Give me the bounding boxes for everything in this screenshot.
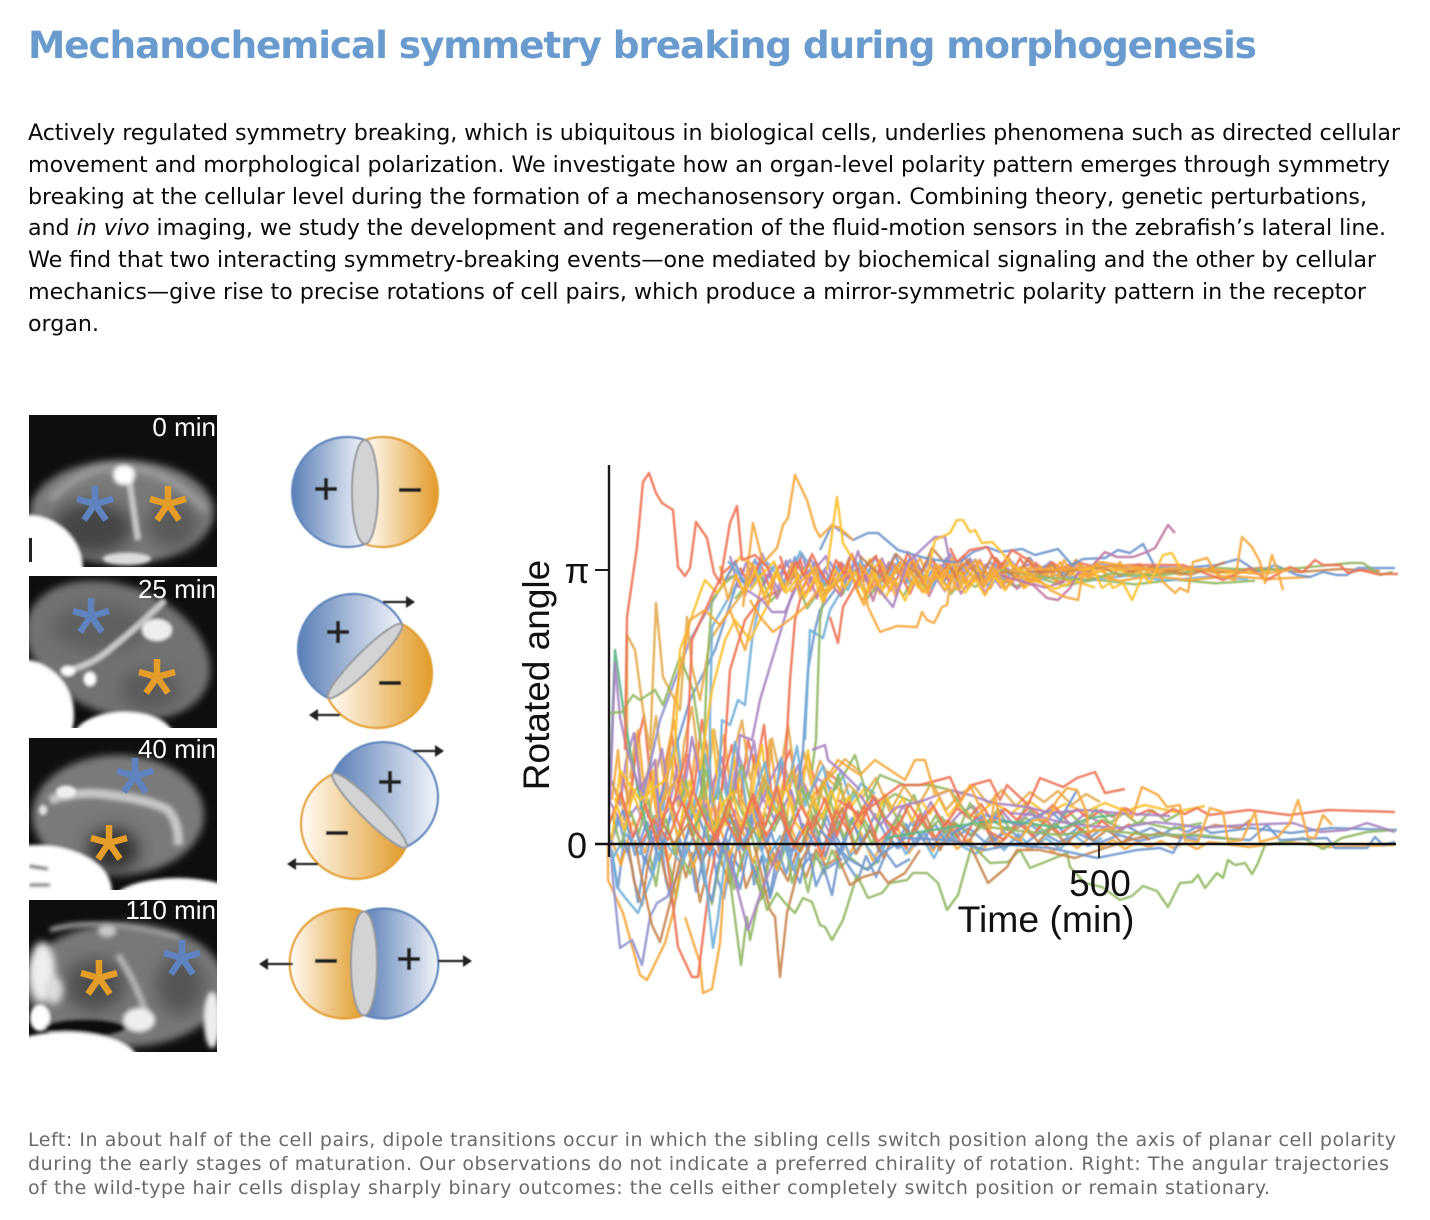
text block: abstract: mechanics—give rise to precise rotations of cell pairs, which produce a mirror-symmetric polarity pattern in the receptor xyxy=(28,279,1367,305)
y tick label: 0: 0 xyxy=(567,825,587,866)
dipole: rotating 135 degrees xyxy=(287,742,444,879)
text block: abstract: breaking at the cellular level during the formation of a mechanosensory organ. Combining theory, genetic perturbations, xyxy=(28,184,1367,210)
caption: during the early stages of maturation. Our observations do not indicate a preferred chirality of rotation. Right: The angular trajectories xyxy=(28,1153,1389,1175)
micrograph: 40 min xyxy=(29,738,217,890)
text block: abstract: Actively regulated symmetry breaking, which is ubiquitous in biological cells, underlies phenomena such as directed cellular xyxy=(28,120,1401,146)
asterisk: blue xyxy=(77,486,113,520)
text block: abstract: and in vivo imaging, we study the development and regeneration of the fluid-motion sensors in the zebrafish’s lateral line. xyxy=(28,215,1386,241)
micrograph: 40 min: 40 min xyxy=(138,734,216,764)
text block: abstract: organ. xyxy=(28,311,99,337)
caption xyxy=(28,1129,1396,1199)
micrograph: 0 min: 0 min xyxy=(152,412,216,442)
x axis label: Time (min) xyxy=(958,898,1134,940)
asterisk: blue xyxy=(73,598,109,632)
text block: abstract xyxy=(28,120,1401,337)
asterisk: orange xyxy=(81,960,117,994)
asterisk: orange xyxy=(150,486,186,520)
text block: abstract: movement and morphological polarization. We investigate how an organ-level polarity pattern emerges through symmetry xyxy=(28,152,1390,178)
asterisk: orange xyxy=(139,659,175,693)
micrograph: 25 min xyxy=(29,576,217,728)
asterisk: blue xyxy=(164,940,200,974)
micrograph: 110 min: 110 min xyxy=(125,895,216,925)
y axis label: Rotated angle xyxy=(516,560,557,790)
axes xyxy=(595,465,1396,858)
text block: abstract: We find that two interacting symmetry-breaking events—one mediated by biochemical signaling and the other by cellular xyxy=(28,247,1377,273)
line chart: rotated angle versus time xyxy=(516,465,1398,993)
caption: Left: In about half of the cell pairs, dipole transitions occur in which the sibling cells switch position along the axis of planar cell polarity xyxy=(28,1129,1396,1151)
panel: microscopy time series xyxy=(29,415,217,1052)
dipole: rotating 45 degrees xyxy=(298,594,432,728)
micrograph: 25 min: 25 min xyxy=(138,574,216,604)
dipole: initial, plus left xyxy=(292,437,438,547)
micrograph: 110 min xyxy=(29,900,217,1052)
asterisk: blue xyxy=(117,758,153,792)
x tick label: 500: 500 xyxy=(1069,863,1131,904)
title: Mechanochemical symmetry breaking during morphogenesis xyxy=(28,23,1257,67)
trajectories xyxy=(608,473,1398,993)
y tick label: pi: π xyxy=(565,550,589,591)
asterisk: orange xyxy=(91,825,127,859)
dipole: final, plus right xyxy=(259,908,472,1018)
caption: of the wild-type hair cells display sharply binary outcomes: the cells either completely switch position or remain stationary. xyxy=(28,1177,1270,1199)
micrograph: 0 min xyxy=(29,415,217,567)
panel: dipole diagrams xyxy=(259,437,472,1018)
